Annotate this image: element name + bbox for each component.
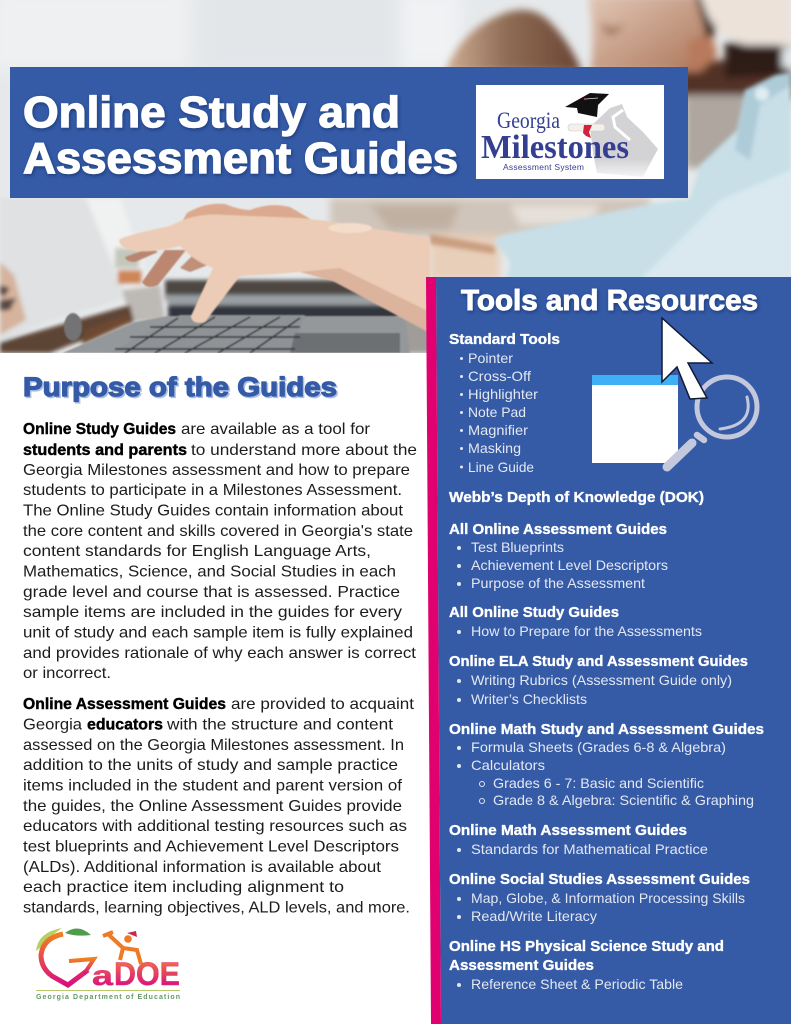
icon: magnifier xyxy=(667,377,757,467)
list: all online assessment guides: Achievement Level Descriptors xyxy=(471,558,668,573)
text block: online study guides: or incorrect. xyxy=(23,665,111,682)
list: physical science guides: Assessment Guides xyxy=(449,958,594,974)
list: math guides: Grades 6 - 7: Basic and Scientific xyxy=(493,776,704,791)
list: social studies guides: Online Social Studies Assessment Guides xyxy=(449,872,750,888)
text block: online study guides: The Online Study Guides contain information about xyxy=(23,502,404,520)
text block: online study guides: sample items are included in the guides for every xyxy=(23,604,402,621)
list: all online assessment guides: Test Blueprints xyxy=(471,540,564,555)
accent bar xyxy=(426,277,441,1024)
heading: purpose: Purpose of the Guides xyxy=(23,372,337,402)
text block: online assessment guides: educators with additional testing resources such as xyxy=(23,818,407,835)
text block: online assessment guides: test blueprints and Achievement Level Descriptors xyxy=(23,838,399,856)
list: social studies guides: Map, Globe, & Information Processing Skills xyxy=(471,891,745,906)
text block: online assessment guides: educators xyxy=(87,716,163,734)
logo: GaDOE xyxy=(36,928,180,1001)
list: standard tools: Note Pad xyxy=(468,405,526,420)
list: math assessment guides: Standards for Mathematical Practice xyxy=(471,842,708,857)
list: ELA guides: Writing Rubrics (Assessment Guide only) xyxy=(471,673,732,688)
text block: online assessment guides: each practice item including alignment to xyxy=(23,879,344,896)
text block: online study guides: to understand more about the xyxy=(191,442,417,459)
list: standard tools: Cross-Off xyxy=(468,369,531,384)
list: standard tools: Highlighter xyxy=(468,387,538,402)
header banner xyxy=(10,67,688,198)
heading: tools and resources: Tools and Resources xyxy=(461,285,758,317)
logo: GaDOE: Georgia Department of Education xyxy=(36,994,180,1001)
text block: online assessment guides: standards, learning objectives, ALD levels, and more. xyxy=(23,900,410,916)
text block: online assessment guides: (ALDs). Additional information is available about xyxy=(23,859,382,876)
text block: online assessment guides: items included in the student and parent version of xyxy=(23,778,403,794)
list: standard tools: Magnifier xyxy=(468,423,528,438)
list: standard tools: Line Guide xyxy=(468,460,534,475)
text block: online assessment guides: Online Assessment Guides xyxy=(23,696,226,713)
title xyxy=(23,88,458,183)
text block: online study guides: grade level and course that is assessed. Practice xyxy=(23,584,400,601)
heading: Webb's DOK: Webb’s Depth of Knowledge (DOK) xyxy=(449,490,704,506)
icon: graduation cap xyxy=(565,93,609,117)
list: standard tools: Masking xyxy=(468,441,521,456)
list: all online assessment guides: All Online Assessment Guides xyxy=(449,522,667,538)
text block: online study guides: Online Study Guides xyxy=(23,421,176,438)
list: math assessment guides: Online Math Assessment Guides xyxy=(449,823,687,839)
text block: online study guides: students to participate in a Milestones Assessment. xyxy=(23,482,402,499)
text block: online assessment guides: Georgia xyxy=(23,716,82,734)
list: all online assessment guides xyxy=(449,522,668,591)
text block: online assessment guides: addition to the units of study and sample practice xyxy=(23,757,398,774)
text block: online assessment guides: the guides, the Online Assessment Guides provide xyxy=(23,798,402,815)
text block: online study guides: are available as a tool for xyxy=(181,421,370,438)
list: math guides xyxy=(449,722,764,808)
list: standard tools xyxy=(449,332,560,475)
list: physical science guides: Reference Sheet & Periodic Table xyxy=(471,977,683,992)
list: math guides: Formula Sheets (Grades 6-8 & Algebra) xyxy=(471,740,726,755)
text block: online study guides: unit of study and each sample item is fully explained xyxy=(23,624,413,642)
text block: online assessment guides xyxy=(23,696,415,916)
icon: note pad xyxy=(592,375,678,463)
list: social studies guides xyxy=(449,872,750,924)
list: physical science guides: Online HS Physical Science Study and xyxy=(449,939,724,955)
list: ELA guides: Writer’s Checklists xyxy=(471,692,587,707)
background photo: students typing on laptops xyxy=(0,0,791,353)
panel: purpose of the guides xyxy=(0,353,431,1024)
list: all online study guides: How to Prepare for the Assessments xyxy=(471,624,702,639)
list: math guides: Calculators xyxy=(471,758,545,773)
logo: Georgia Milestones: Georgia xyxy=(497,108,560,133)
text block: online study guides: Mathematics, Science, and Social Studies in each xyxy=(23,564,396,580)
panel: tools and resources xyxy=(426,277,791,1024)
title: Assessment Guides xyxy=(23,134,458,183)
list: social studies guides: Read/Write Literacy xyxy=(471,909,597,924)
text block: online study guides: content standards for English Language Arts, xyxy=(23,543,371,560)
list: math guides: Grade 8 & Algebra: Scientific & Graphing xyxy=(493,793,754,808)
text block: online assessment guides: with the structure and content xyxy=(166,716,394,734)
text block: online study guides: and provides rationale of why each answer is correct xyxy=(23,645,417,662)
logo: GaDOE: DOE xyxy=(114,956,180,992)
list: math assessment guides xyxy=(449,823,708,857)
title: Online Study and xyxy=(23,88,400,137)
list: math guides: Online Math Study and Assessment Guides xyxy=(449,722,764,738)
logo: Georgia Milestones: Milestones xyxy=(481,129,629,166)
list: standard tools: Standard Tools xyxy=(449,332,560,348)
list: all online study guides: All Online Study Guides xyxy=(449,605,619,621)
list: ELA guides: Online ELA Study and Assessment Guides xyxy=(449,654,748,670)
text block: online assessment guides: are provided to acquaint xyxy=(231,696,415,713)
list: ELA guides xyxy=(449,654,748,707)
text block: online study guides: students and parents xyxy=(23,442,187,459)
list: standard tools: Pointer xyxy=(468,351,513,366)
heading: purpose: Purpose of the Guides xyxy=(24,374,339,404)
logo: GaDOE: a xyxy=(92,960,114,991)
logo: Georgia Milestones: Assessment System xyxy=(503,162,584,172)
icon: diploma scroll xyxy=(568,124,605,138)
logo: Georgia Milestones xyxy=(476,85,664,179)
text block: online study guides: Georgia Milestones assessment and how to prepare xyxy=(23,462,410,479)
list: all online study guides xyxy=(449,605,702,639)
list: physical science guides xyxy=(449,939,724,992)
text block: online assessment guides: assessed on the Georgia Milestones assessment. In xyxy=(23,737,404,754)
text block: online study guides xyxy=(23,421,417,682)
list: all online assessment guides: Purpose of the Assessment xyxy=(471,576,645,591)
icon: pointer arrow xyxy=(662,318,712,399)
icon: Georgia state map xyxy=(590,104,658,177)
text block: online study guides: the core content and skills covered in Georgia's state xyxy=(23,523,413,540)
